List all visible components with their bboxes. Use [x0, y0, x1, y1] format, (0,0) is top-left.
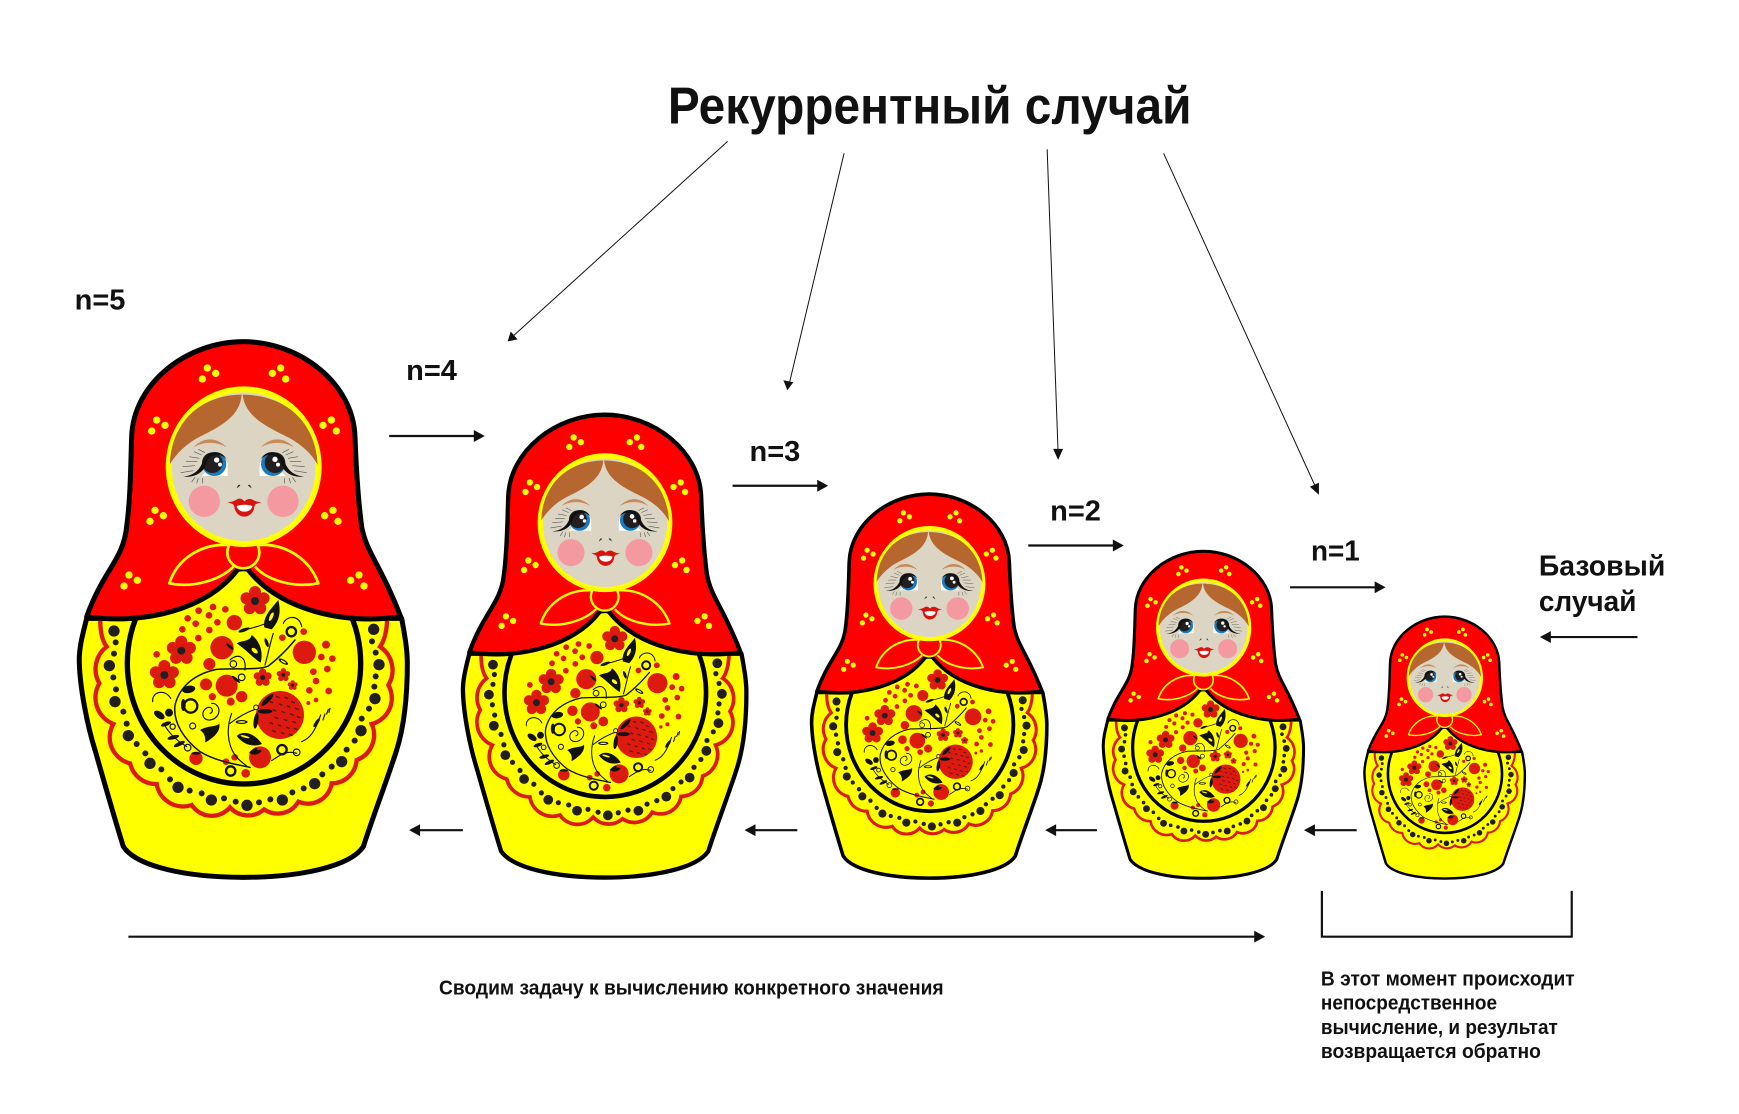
- doll n=1: [1364, 617, 1525, 879]
- long arrow: reduction: [128, 931, 1265, 943]
- label: n=2: n=2: [1050, 496, 1101, 528]
- return arrow: n=4 to n=5: [409, 824, 463, 836]
- caption: base case explanation: непосредственное: [1321, 992, 1497, 1014]
- arrow: n=4 to n=3: [733, 480, 828, 492]
- arrow: n=3 to n=2: [1028, 540, 1124, 551]
- scarf knot and tails: [169, 536, 318, 585]
- label: base case: случай: [1539, 586, 1636, 618]
- dots: [104, 624, 385, 811]
- doll n=5: [79, 342, 407, 877]
- cheeks: [189, 486, 299, 517]
- scarf yellow dots: [120, 364, 368, 590]
- label: n=4: n=4: [406, 355, 457, 387]
- label: n=1: n=1: [1311, 535, 1360, 567]
- caption: base case explanation: [1321, 968, 1575, 1063]
- title: Рекуррентный случай: [668, 76, 1191, 134]
- caption: base case explanation: В этот момент происходит: [1321, 968, 1575, 990]
- floral pattern: [150, 586, 336, 778]
- headscarf: [87, 342, 401, 619]
- bracket: base case: [1322, 891, 1572, 937]
- label: base case: Базовый: [1539, 550, 1665, 582]
- doll body: [79, 618, 407, 877]
- arrow: recursive case to n=2: [1047, 149, 1063, 460]
- doll n=3: [812, 494, 1047, 878]
- arrow: recursive case to n=4: [508, 141, 728, 341]
- return arrow: n=1 to n=2: [1304, 824, 1357, 836]
- arrow: recursive case to n=3: [783, 153, 844, 390]
- arrow: recursive case to n=1: [1164, 153, 1319, 495]
- face: [169, 389, 319, 544]
- caption: base case explanation: возвращается обратно: [1321, 1041, 1541, 1063]
- return arrow: n=3 to n=4: [745, 824, 797, 836]
- doll n=2: [1103, 551, 1304, 878]
- strawberry seeds: [270, 697, 300, 735]
- mouth: [228, 499, 261, 517]
- hair: [170, 395, 318, 465]
- label: base case: [1539, 550, 1665, 618]
- return arrow: n=2 to n=3: [1045, 824, 1097, 836]
- arrow: n=5 to n=4: [389, 430, 485, 442]
- apron ring: [127, 543, 361, 784]
- nose: [237, 485, 252, 488]
- scalloped border: [95, 613, 393, 816]
- arrow: base case pointer: [1540, 631, 1637, 643]
- label: n=3: n=3: [750, 436, 800, 468]
- doll n=4: [463, 415, 746, 878]
- eyes: [181, 439, 307, 483]
- caption: base case explanation: вычисление, и результат: [1321, 1017, 1558, 1039]
- black foliage: [153, 600, 330, 776]
- apron ornament: [95, 543, 393, 816]
- arrow: n=2 to n=1: [1290, 581, 1386, 593]
- caption: reduction: Сводим задачу к вычислению конкретного значения: [439, 977, 944, 999]
- label: n=5: n=5: [75, 285, 125, 317]
